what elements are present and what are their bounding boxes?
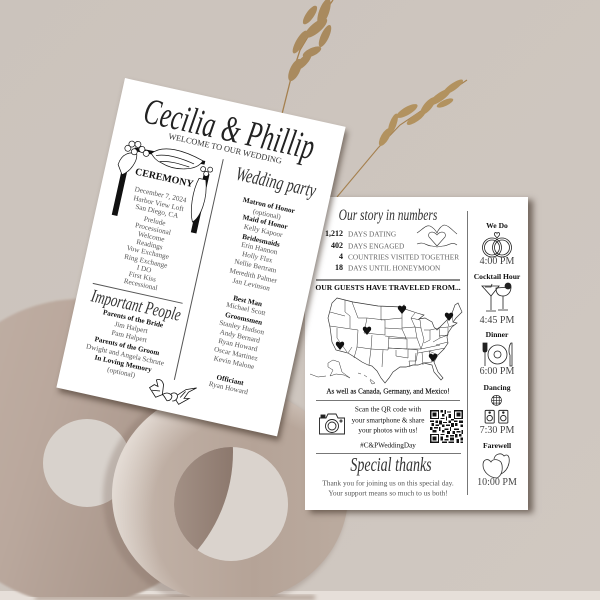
title: couple names: Cecilia & Phillip: [140, 91, 319, 168]
heading: special thanks: Special thanks: [350, 456, 432, 477]
section: wedding party: Maid of Honor: [242, 213, 288, 231]
time: 4:45 PM: 4:45 PM: [480, 315, 514, 326]
stats list: 1,212: [325, 229, 343, 238]
section: wedding party: Kevin Malone: [213, 354, 255, 371]
time: 4:00 PM: 4:00 PM: [480, 256, 514, 267]
section: wedding party: Andy Bernard: [219, 328, 261, 345]
event: dinner: Dinner: [486, 330, 508, 339]
section: wedding party: Kelly Kapoor: [243, 223, 283, 239]
stats list: [325, 229, 460, 272]
icon: two hearts: [482, 453, 510, 478]
section: ceremony: Harbor View Loft: [133, 194, 185, 213]
QR instructions: Scan the QR code with: [355, 405, 421, 413]
section: ceremony: San Diego, CA: [135, 203, 179, 220]
panel: day timeline: [474, 221, 520, 488]
shadow of right vase on left vase: [103, 385, 347, 600]
section: wedding party: Holly Flax: [241, 250, 273, 265]
section: ceremony: Recessional: [123, 277, 158, 292]
section: wedding party: Jan Levinson: [232, 277, 271, 293]
section: wedding party: Officiant: [216, 373, 244, 387]
icon: rings: [482, 232, 512, 258]
illustration: two doves with hearts: [149, 379, 197, 405]
section: important people: In Loving Memory: [94, 354, 152, 374]
table: [0, 591, 600, 600]
section: important people: Pam Halpert: [111, 329, 148, 344]
section: wedding party: (optional): [252, 207, 282, 221]
section: important people: Dwight and Angela Schrute: [85, 342, 165, 368]
icon: heart hands: [416, 224, 458, 248]
section: important people: Parents of the Bride: [102, 308, 164, 329]
thank you message: Thank you for joining us on this special day.: [322, 478, 454, 487]
thank you message: Your support means so much to us both!: [328, 488, 448, 497]
section: ceremony: First Kiss: [128, 269, 157, 283]
section: wedding party: Michael Scott: [225, 301, 266, 317]
section: ceremony: Prelude: [143, 215, 166, 228]
time: 6:00 PM: 6:00 PM: [480, 366, 514, 377]
stats list: DAYS DATING: [348, 229, 396, 238]
section: ceremony: Processional: [134, 221, 172, 237]
left vase: [0, 298, 161, 597]
caption: other countries: As well as Canada, Germany, and Mexico!: [326, 387, 450, 395]
time: 7:30 PM: 7:30 PM: [480, 425, 514, 436]
section: important people: Important People: [89, 285, 183, 325]
icon: cocktails: [481, 282, 512, 312]
panel: left card, wedding program: [56, 78, 346, 436]
icon: disco ball and speakers: [484, 395, 508, 424]
map hearts: [398, 306, 406, 314]
section: important people: Jim Halpert: [114, 320, 148, 335]
event: cocktail hour: Cocktail Hour: [474, 272, 520, 281]
section: important people: Parents of the Groom: [94, 335, 160, 357]
section: ceremony: Welcome: [137, 230, 165, 244]
heading: our story in numbers: Our story in numbers: [339, 208, 437, 224]
section: wedding party: [208, 164, 318, 396]
section: ceremony: I DO: [136, 263, 152, 274]
QR instructions: your photos with us!: [358, 426, 418, 434]
section: wedding party: Matron of Honor: [242, 196, 296, 215]
QR code: [430, 410, 463, 443]
section: ceremony: Ring Exchange: [124, 252, 168, 269]
icon: camera: [319, 414, 345, 434]
US outline: [328, 298, 462, 383]
section: wedding party: Oscar Martinez: [213, 345, 258, 363]
QR instructions: your smartphone & share: [352, 416, 424, 424]
QR instructions: [352, 405, 424, 449]
Alaska and Hawaii: [310, 360, 375, 384]
stats list: DAYS ENGAGED: [348, 241, 404, 250]
QR instructions: #C&PWeddingDay: [360, 441, 416, 449]
section: wedding party: Erin Hannon: [240, 241, 278, 256]
panel: right card, story and timeline: [305, 197, 528, 510]
section: wedding party: Nellie Bertram: [234, 258, 277, 275]
section: wedding party: Meredith Palmer: [229, 267, 278, 285]
stats list: DAYS UNTIL HONEYMOON: [348, 263, 440, 272]
section: wedding party: Stanley Hudson: [219, 319, 265, 336]
section: ceremony: CEREMONY: [134, 167, 194, 190]
stats list: COUNTRIES VISITED TOGETHER: [348, 252, 459, 261]
section: wedding party: Best Man: [232, 294, 263, 308]
section: wedding party: Groomsmen: [224, 311, 263, 327]
section: ceremony: Vow Exchange: [126, 244, 170, 261]
section: ceremony: [123, 167, 194, 292]
section: wedding party: Ryan Howard: [208, 380, 249, 396]
section: ceremony: December 7, 2024: [134, 185, 187, 204]
dried grass lower: [337, 77, 467, 197]
section: wedding party: Ryan Howard: [218, 337, 258, 353]
event: we do: We Do: [486, 221, 508, 230]
event: dancing: Dancing: [483, 383, 511, 392]
section: important people: (optional): [106, 366, 136, 380]
heading: guests travelled: OUR GUESTS HAVE TRAVELED FROM...: [315, 283, 461, 292]
subtitle: welcome: WELCOME TO OUR WEDDING: [168, 132, 283, 166]
dried grass upper: [282, 0, 334, 114]
stats list: 4: [339, 252, 343, 261]
right vase: [112, 402, 346, 597]
section: important people: [85, 285, 183, 380]
state lines: [330, 300, 454, 367]
section: ceremony: Readings: [136, 238, 163, 251]
icon: plate and cutlery: [482, 342, 512, 366]
time: 10:00 PM: 10:00 PM: [477, 477, 517, 488]
thank you message: [322, 478, 454, 497]
illustration: floral arch: [112, 140, 213, 234]
section: wedding party: Wedding party: [234, 164, 318, 203]
stats list: 18: [335, 263, 343, 272]
stats list: 402: [331, 241, 343, 250]
event: farewell: Farewell: [483, 441, 511, 450]
section: wedding party: Bridesmaids: [242, 232, 281, 248]
